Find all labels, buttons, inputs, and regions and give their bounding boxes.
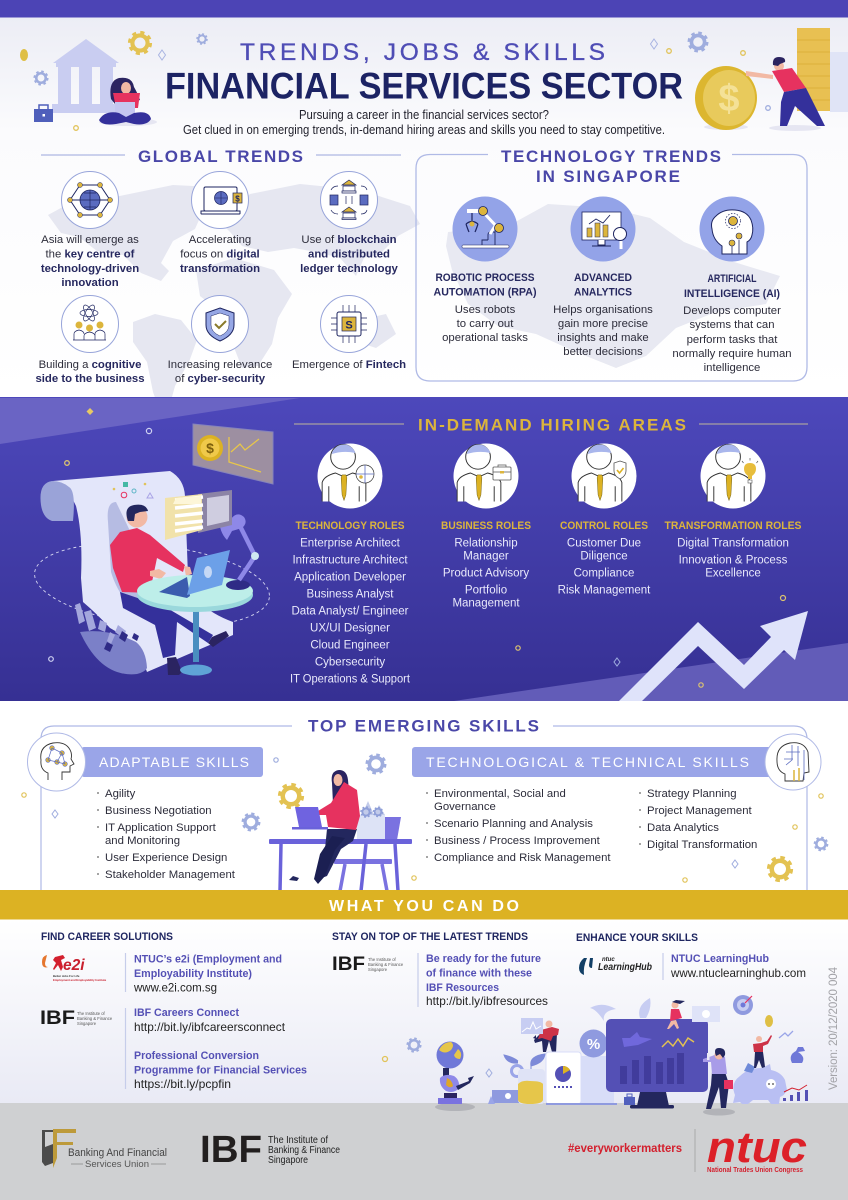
version note: Version: 20/12/2020 004 bbox=[828, 966, 840, 1090]
trend: blockchain: and distributed bbox=[308, 248, 390, 260]
column: transformation roles: TRANSFORMATION ROLES bbox=[664, 520, 802, 532]
column: find career solutions: FIND CAREER SOLUTIONS bbox=[41, 931, 173, 943]
header illustration: coin stack and man pushing a coin bbox=[695, 28, 848, 131]
tech: artificial intelligence: perform tasks that bbox=[687, 334, 778, 346]
skills list: adaptable: Business Negotiation bbox=[105, 805, 212, 817]
column: business roles: Manager bbox=[463, 550, 509, 562]
logo: NTUC LearningHub: ntuc bbox=[602, 957, 615, 963]
skills list: adaptable: and Monitoring bbox=[105, 835, 180, 847]
column: control roles: Customer Due bbox=[567, 538, 641, 550]
logo: IBF small: IBF bbox=[332, 954, 365, 975]
trend: cognitive side: Building a cognitive bbox=[39, 359, 141, 371]
column: technology roles: TECHNOLOGY ROLES bbox=[296, 520, 404, 532]
skills list: technological column one bbox=[426, 788, 611, 864]
column: enhance your skills: ENHANCE YOUR SKILLS bbox=[576, 932, 698, 944]
column: technology roles bbox=[290, 444, 411, 686]
heading: technology trends in Singapore: IN SINGAPORE bbox=[536, 167, 680, 186]
trend: fintech bbox=[292, 296, 406, 371]
column: find career solutions: www.e2i.com.sg bbox=[133, 982, 217, 994]
skills list: adaptable: Agility bbox=[105, 788, 136, 800]
bottom panel background bbox=[0, 920, 848, 1104]
floating data panel bbox=[165, 490, 232, 540]
tech: artificial intelligence: normally require human bbox=[672, 348, 792, 360]
percent badge: % bbox=[587, 1036, 600, 1053]
column: stay on top of the latest trends: of finance with these bbox=[426, 968, 532, 980]
tech: advanced analytics: better decisions bbox=[563, 346, 643, 358]
woman with shopping bag bbox=[703, 1048, 735, 1116]
logo: NTUC with hashtag: ntuc bbox=[707, 1123, 807, 1172]
tech: artificial intelligence: ARTIFICIAL bbox=[708, 273, 757, 285]
singapore map backdrop bbox=[446, 204, 780, 368]
logo: IBF small bbox=[332, 954, 404, 975]
logo: NTUC LearningHub: LearningHub bbox=[598, 962, 652, 973]
logo: Banking and Financial Services Union bbox=[42, 1129, 167, 1170]
man on piggy bank with coin bbox=[753, 1015, 773, 1068]
logo: Institute of Banking and Finance: Singapore bbox=[268, 1155, 308, 1166]
column: technology roles: UX/UI Designer bbox=[310, 622, 390, 634]
column: enhance your skills: NTUC LearningHub bbox=[671, 953, 769, 965]
tech: artificial intelligence: Develops computer bbox=[683, 305, 781, 317]
heading: in-demand hiring areas: IN-DEMAND HIRING AREAS bbox=[418, 416, 686, 434]
column: technology roles: Infrastructure Architect bbox=[292, 554, 408, 566]
leaves behind monitor bbox=[590, 998, 650, 1021]
trend: digital transformation: Accelerating bbox=[189, 234, 251, 246]
column: technology roles: IT Operations & Support bbox=[290, 674, 411, 686]
floating chart panel bbox=[193, 424, 273, 484]
skills list: adaptable: User Experience Design bbox=[105, 852, 227, 864]
open book with pie chart bbox=[546, 1052, 617, 1104]
illustration: woman working at desk bbox=[269, 770, 412, 891]
skills list: technological column two: Project Management bbox=[647, 805, 753, 817]
logo: IBF small: Banking & Finance bbox=[368, 962, 404, 967]
column: stay on top of the latest trends: IBF Resources bbox=[426, 982, 499, 994]
skills decorations: gears bbox=[22, 755, 827, 882]
panel header: technological and technical skills: TECHNOLOGICAL & TECHNICAL SKILLS bbox=[426, 754, 749, 770]
trend: key centre of technology: innovation bbox=[61, 277, 119, 289]
trend: digital transformation: $ bbox=[235, 194, 240, 204]
arrow: rising trend bbox=[619, 611, 808, 701]
skills list: technological column two bbox=[639, 788, 757, 851]
skills list: technological column two: Strategy Planning bbox=[647, 788, 737, 800]
subtitle text bbox=[183, 108, 665, 137]
logo: NTUC LearningHub bbox=[579, 957, 652, 975]
column: stay on top of the latest trends: Be ready for the future bbox=[426, 953, 541, 965]
illustration: man working on scroll bbox=[30, 424, 274, 676]
heading: global trends: GLOBAL TRENDS bbox=[138, 147, 303, 166]
column: find career solutions: https://bit.ly/pcpfin bbox=[134, 1078, 231, 1091]
column: stay on top of the latest trends: STAY ON TOP OF THE LATEST TRENDS bbox=[332, 931, 528, 943]
logo: IBF: The Institute of bbox=[77, 1011, 106, 1016]
icon: briefcase bbox=[34, 105, 53, 122]
tech: advanced analytics: ANALYTICS bbox=[574, 286, 632, 298]
logo: IBF: Singapore bbox=[77, 1021, 97, 1026]
logo: Institute of Banking and Finance: The Institute of bbox=[268, 1135, 328, 1146]
column: find career solutions: http://bit.ly/ibfcareersconnect bbox=[134, 1021, 286, 1034]
column: business roles: Product Advisory bbox=[443, 568, 529, 580]
logo: NTUC with hashtag: #everyworkermatters bbox=[568, 1141, 682, 1155]
trend: digital transformation bbox=[180, 172, 260, 275]
column: business roles: Management bbox=[452, 598, 520, 610]
column: control roles bbox=[558, 444, 651, 596]
footer background bbox=[0, 1103, 848, 1200]
tech: artificial intelligence bbox=[672, 196, 792, 374]
tech: robotic process automation: ROBOTIC PROCESS bbox=[436, 272, 534, 284]
desk lamp bbox=[219, 514, 259, 590]
column: technology roles: Cloud Engineer bbox=[310, 640, 390, 652]
world map backdrop bbox=[48, 184, 420, 414]
column: enhance your skills: www.ntuclearninghub.com bbox=[670, 967, 806, 980]
trend: cyber-security bbox=[168, 296, 272, 385]
column: technology roles: Enterprise Architect bbox=[300, 538, 401, 550]
column: find career solutions: Employability Institute) bbox=[134, 968, 252, 980]
column: find career solutions: Professional Conversion bbox=[134, 1050, 259, 1062]
logo: Institute of Banking and Finance: IBF bbox=[200, 1129, 262, 1171]
trend: cognitive side bbox=[35, 296, 145, 385]
monitor with bar chart bbox=[606, 1019, 708, 1108]
icon: bank building bbox=[52, 39, 122, 113]
tech: robotic process automation bbox=[434, 196, 537, 344]
column: control roles: CONTROL ROLES bbox=[560, 520, 648, 532]
trend: blockchain: Use of blockchain bbox=[301, 234, 397, 246]
logo: IBF: IBF bbox=[40, 1008, 75, 1029]
panel: top emerging skills bbox=[22, 716, 827, 891]
trend: cognitive side: side to the business bbox=[35, 373, 145, 385]
column: transformation roles: Digital Transformation bbox=[677, 538, 789, 550]
logo: e2i: e2i bbox=[63, 957, 85, 974]
tech: advanced analytics: Helps organisations bbox=[553, 304, 653, 316]
subtitle text: Pursuing a career in the financial services sector? bbox=[299, 108, 549, 122]
tech: advanced analytics: gain more precise bbox=[558, 318, 648, 330]
logo: Institute of Banking and Finance: Banking & Finance bbox=[268, 1145, 340, 1156]
bottom illustration: finance scene bbox=[382, 995, 808, 1116]
heading: technology trends in Singapore bbox=[501, 147, 721, 186]
tech: artificial intelligence: INTELLIGENCE (AI) bbox=[684, 288, 780, 300]
column: business roles bbox=[441, 444, 531, 610]
floating chart panel: $ bbox=[206, 440, 214, 456]
column: transformation roles bbox=[664, 444, 802, 580]
tech: advanced analytics: insights and make bbox=[557, 332, 649, 344]
analyst with watering can bbox=[533, 1020, 559, 1053]
skills list: adaptable bbox=[97, 788, 236, 881]
header illustration: coin stack and man pushing a coin: $ bbox=[718, 78, 740, 120]
trend: digital transformation: focus on digital bbox=[180, 248, 260, 260]
figure: woman seated with laptop bbox=[99, 78, 157, 126]
logo: NTUC with hashtag: National Trades Union Congress bbox=[707, 1167, 803, 1174]
column: transformation roles: Excellence bbox=[705, 568, 761, 580]
column: stay on top of the latest trends bbox=[332, 931, 548, 1008]
column: technology roles: Business Analyst bbox=[307, 588, 394, 600]
column: find career solutions bbox=[40, 931, 307, 1091]
panel: global trends bbox=[35, 147, 406, 385]
header decorations: gears and dots bbox=[20, 32, 770, 130]
skills list: technological column one: Business / Process Improvement bbox=[434, 835, 601, 847]
column: technology roles: Application Developer bbox=[294, 572, 406, 584]
figure: seated man bbox=[108, 502, 229, 675]
column: technology roles: Cybersecurity bbox=[315, 656, 385, 668]
trend: blockchain bbox=[300, 172, 399, 275]
trend: key centre of technology: Asia will emerge as bbox=[41, 234, 139, 246]
skills list: adaptable: IT Application Support bbox=[105, 822, 217, 834]
tech: advanced analytics bbox=[553, 196, 653, 358]
logo: Banking and Financial Services Union: Banking And Financial bbox=[68, 1147, 167, 1159]
panel: in-demand hiring areas background bbox=[0, 397, 848, 701]
tech: robotic process automation: Uses robots bbox=[455, 304, 516, 316]
logo: e2i: Employment and Employability Institute bbox=[53, 978, 107, 982]
section band: what you can do bbox=[0, 890, 848, 920]
skills list: adaptable: Stakeholder Management bbox=[105, 869, 236, 881]
title: FINANCIAL SERVICES SECTOR bbox=[165, 66, 683, 106]
trend: fintech: S bbox=[345, 320, 353, 332]
skills list: technological column two: Digital Transformation bbox=[647, 839, 757, 851]
logo: IBF bbox=[40, 1008, 113, 1029]
title bbox=[165, 39, 683, 106]
trend: cyber-security: Increasing relevance bbox=[168, 359, 272, 371]
panel header: adaptable skills bbox=[28, 733, 263, 791]
column: stay on top of the latest trends: http://bit.ly/ibfresources bbox=[426, 995, 548, 1008]
tech: advanced analytics: ADVANCED bbox=[574, 272, 632, 284]
column: find career solutions: IBF Careers Connect bbox=[134, 1007, 239, 1019]
heading: technology trends in Singapore: TECHNOLOGY TRENDS bbox=[501, 147, 721, 166]
top banner bar bbox=[0, 0, 848, 18]
piggy bank bbox=[733, 1063, 787, 1104]
logo: e2i: Better Jobs For Life bbox=[53, 974, 80, 978]
trend: key centre of technology: technology-driven bbox=[41, 263, 139, 275]
hiring section decorations bbox=[49, 408, 785, 687]
trend: fintech: Emergence of Fintech bbox=[292, 359, 406, 371]
column: business roles: Relationship bbox=[454, 538, 518, 550]
tech: robotic process automation: AUTOMATION (RPA) bbox=[434, 286, 537, 298]
column: find career solutions: NTUC’s e2i (Employment and bbox=[134, 954, 282, 966]
table and laptop bbox=[137, 550, 253, 676]
tech: artificial intelligence: systems that can bbox=[689, 319, 775, 331]
trend: blockchain: ledger technology bbox=[300, 263, 399, 275]
logo: NTUC with hashtag bbox=[568, 1123, 807, 1174]
panel: technology trends in Singapore bbox=[416, 147, 807, 381]
logo: Banking and Financial Services Union: Services Union bbox=[85, 1159, 149, 1170]
trend: digital transformation: transformation bbox=[180, 263, 260, 275]
tech: artificial intelligence: intelligence bbox=[704, 362, 760, 374]
logo: IBF small: Singapore bbox=[368, 967, 388, 972]
logo: Institute of Banking and Finance bbox=[200, 1129, 340, 1171]
trend: key centre of technology: the key centre of bbox=[46, 248, 135, 260]
mini bar chart bbox=[783, 1085, 808, 1101]
seated woman on monitor bbox=[667, 1000, 685, 1029]
column: transformation roles: Innovation & Process bbox=[679, 554, 788, 566]
section band: what you can do: WHAT YOU CAN DO bbox=[329, 898, 519, 915]
logo: IBF: Banking & Finance bbox=[77, 1016, 113, 1021]
column: business roles: Portfolio bbox=[465, 584, 507, 596]
decorative money note and target bbox=[692, 995, 805, 1063]
trend: key centre of technology bbox=[41, 172, 139, 289]
column: control roles: Diligence bbox=[580, 550, 628, 562]
column: technology roles: Data Analyst/ Engineer bbox=[292, 606, 409, 618]
percent badge bbox=[580, 1030, 608, 1058]
panel header: technological and technical skills bbox=[412, 734, 821, 790]
small briefcase bbox=[624, 1094, 635, 1105]
column: control roles: Risk Management bbox=[558, 584, 651, 596]
figure: robot bbox=[435, 1042, 475, 1111]
title: TRENDS, JOBS & SKILLS bbox=[240, 39, 605, 66]
column: find career solutions: Programme for Financial Services bbox=[134, 1064, 307, 1076]
skills list: technological column two: Data Analytics bbox=[647, 822, 719, 834]
column: business roles: BUSINESS ROLES bbox=[441, 520, 531, 532]
tech: robotic process automation: to carry out bbox=[457, 318, 514, 330]
heading: top emerging skills: TOP EMERGING SKILLS bbox=[308, 716, 539, 736]
panel header: adaptable skills: ADAPTABLE SKILLS bbox=[99, 754, 249, 770]
trend: cyber-security: of cyber-security bbox=[175, 373, 266, 385]
skills list: technological column one: Scenario Planning and Analysis bbox=[434, 818, 593, 830]
skills list: technological column one: Environmental, Social and bbox=[434, 788, 566, 800]
plant and coin jar bbox=[486, 1054, 545, 1104]
column: enhance your skills bbox=[576, 932, 806, 980]
skills list: technological column one: Governance bbox=[434, 801, 496, 813]
logo: e2i bbox=[42, 955, 107, 982]
chart icon bbox=[521, 1018, 543, 1034]
tech: robotic process automation: operational tasks bbox=[442, 332, 528, 344]
logo: IBF small: The Institute of bbox=[368, 957, 397, 962]
skills list: technological column one: Compliance and Risk Management bbox=[434, 852, 611, 864]
subtitle text: Get clued in on emerging trends, in-demand hiring areas and skills you need to stay competitive. bbox=[183, 123, 665, 137]
column: control roles: Compliance bbox=[574, 568, 634, 580]
header illustration: bank building and woman bbox=[34, 39, 157, 126]
